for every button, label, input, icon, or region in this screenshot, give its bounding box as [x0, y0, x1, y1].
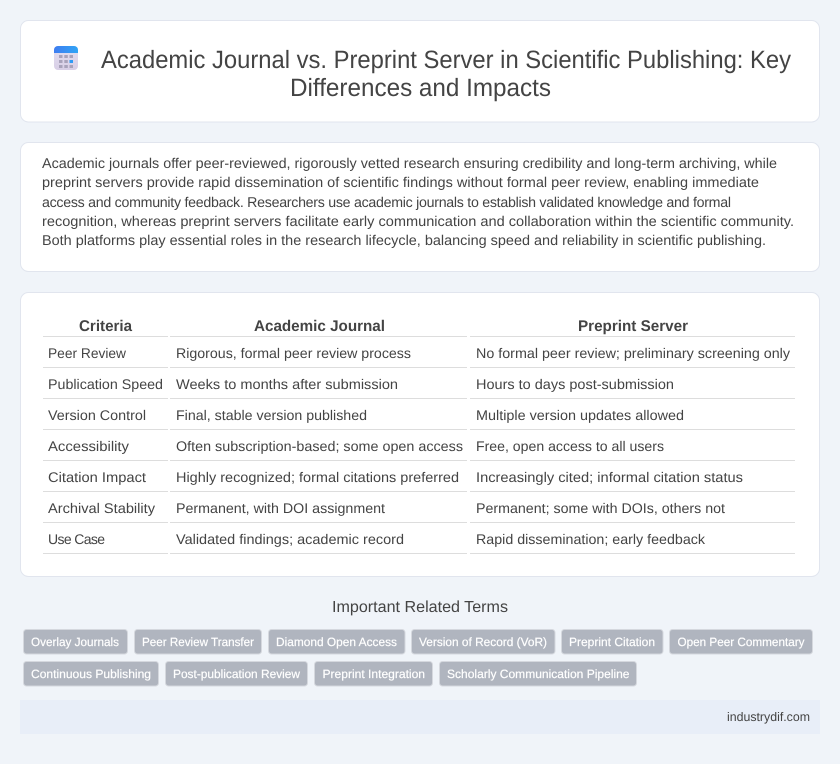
table row: peer review: Peer Review — [48, 345, 127, 361]
text block: summary paragraph: recognition, whereas preprint servers facilitate early communication and collaboration within the scientific community. — [42, 214, 794, 230]
tags: related terms: Continuous Publishing — [31, 667, 151, 681]
table row: use case — [48, 531, 706, 547]
table row: publication speed: Publication Speed — [48, 376, 163, 392]
tags: related terms: Preprint Citation — [569, 635, 655, 649]
table row: use case: Validated findings; academic record — [176, 531, 404, 547]
table header: Preprint Server — [578, 318, 688, 335]
panel: comparison table — [20, 292, 820, 576]
footer: industrydif.com — [727, 710, 810, 724]
text block: summary paragraph — [42, 156, 794, 249]
table row: publication speed: Weeks to months after submission — [176, 376, 398, 392]
table header — [79, 318, 688, 335]
tags: related terms — [24, 630, 812, 686]
table row: accessibility — [48, 438, 664, 454]
table row: citation impact — [48, 469, 743, 485]
table row: publication speed — [48, 376, 674, 392]
table row: version control: Multiple version updates allowed — [476, 407, 684, 423]
table row: version control — [48, 407, 684, 423]
text block: summary paragraph: preprint servers provide rapid dissemination of scientific findings without formal peer review, enabling immediate — [42, 175, 759, 191]
tags: related terms: Diamond Open Access — [276, 635, 397, 649]
panel: summary text — [20, 142, 820, 272]
heading: important related terms: Important Related Terms — [332, 599, 508, 616]
tags: related terms: Peer Review Transfer — [142, 635, 254, 649]
tags: related terms: Open Peer Commentary — [678, 635, 804, 649]
table row: use case: Rapid dissemination; early feedback — [476, 531, 706, 547]
icon: calendar — [54, 46, 78, 70]
table row: citation impact: Citation Impact — [48, 469, 146, 485]
tags: related terms: Version of Record (VoR) — [419, 635, 547, 649]
tags: related terms: Overlay Journals — [31, 635, 119, 649]
table row: peer review — [48, 345, 790, 361]
table row: archival stability: Permanent, with DOI assignment — [176, 500, 385, 516]
table header: Academic Journal — [254, 318, 385, 335]
title — [101, 46, 791, 102]
table row: archival stability: Archival Stability — [48, 500, 155, 516]
table row: archival stability — [48, 500, 725, 516]
title: Differences and Impacts — [290, 74, 551, 102]
table row: peer review: No formal peer review; preliminary screening only — [476, 345, 790, 361]
table row: version control: Final, stable version published — [176, 407, 367, 423]
table header: Criteria — [79, 318, 132, 335]
tags: related terms: Scholarly Communication Pipeline — [447, 667, 630, 681]
table row: citation impact: Increasingly cited; informal citation status — [476, 469, 743, 485]
tags: related terms: Post-publication Review — [173, 667, 300, 681]
table row: accessibility: Accessibility — [48, 438, 129, 454]
table row: archival stability: Permanent; some with DOIs, others not — [476, 500, 725, 516]
text block: summary paragraph: Academic journals offer peer-reviewed, rigorously vetted research ensuring credibility and long-term archiving, while — [42, 156, 777, 172]
text block: summary paragraph: Both platforms play essential roles in the research lifecycle, balancing speed and reliability in scientific publishing. — [42, 233, 766, 249]
panel: header card — [20, 20, 820, 122]
title: Academic Journal vs. Preprint Server in Scientific Publishing: Key — [101, 46, 791, 74]
table row: use case: Use Case — [48, 531, 105, 547]
footer — [20, 700, 820, 734]
tags: related terms: Preprint Integration — [322, 667, 425, 681]
table row: version control: Version Control — [48, 407, 146, 423]
table row: accessibility: Often subscription-based; some open access — [176, 438, 463, 454]
table row: peer review: Rigorous, formal peer review process — [176, 345, 411, 361]
table row: publication speed: Hours to days post-submission — [476, 376, 674, 392]
table row: accessibility: Free, open access to all users — [476, 438, 664, 454]
text block: summary paragraph: access and community feedback. Researchers use academic journals to establish validated knowledge and formal — [42, 195, 731, 211]
table row: citation impact: Highly recognized; formal citations preferred — [176, 469, 459, 485]
